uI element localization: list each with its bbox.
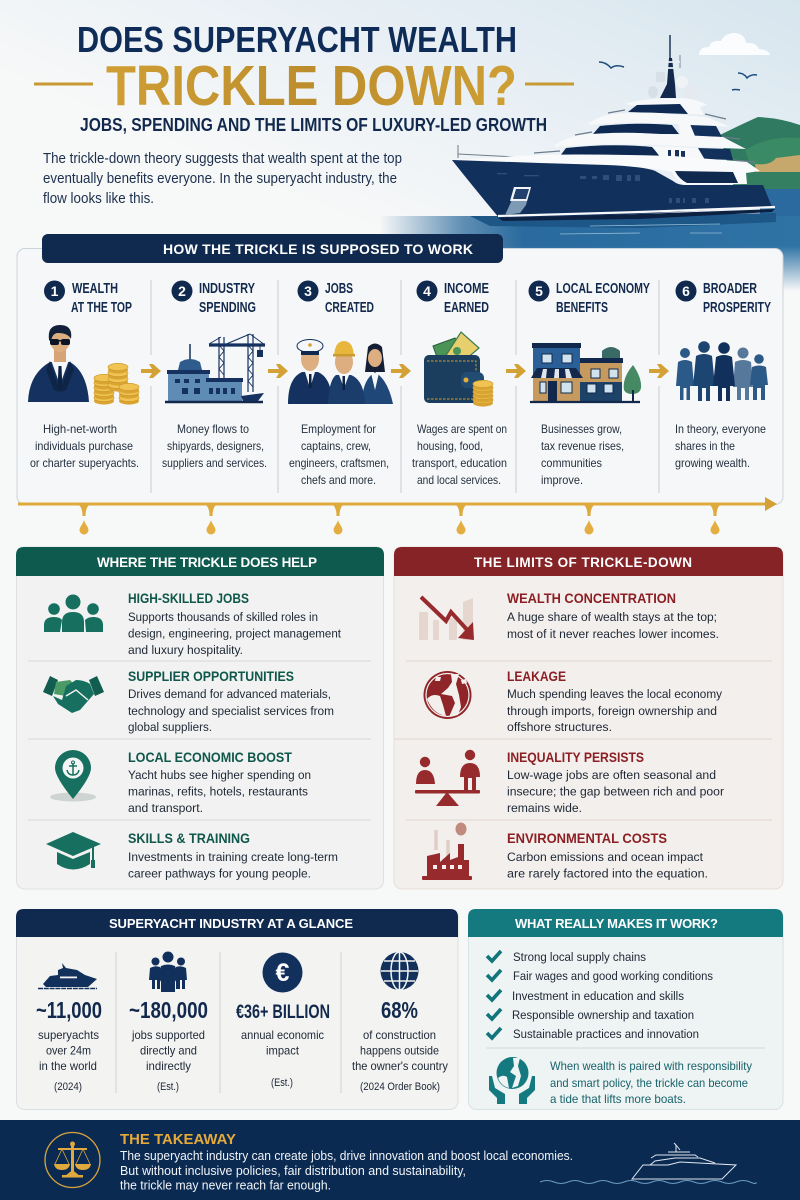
item: skills and training: career pathways for young people.: [128, 866, 311, 880]
step 1: AT THE TOP: [71, 300, 132, 316]
item: supplier opportunities: SUPPLIER OPPORTUNITIES: [128, 668, 294, 684]
checklist: Fair wages and good working conditions: [513, 969, 713, 983]
item: skills and training: Investments in training create long-term: [128, 850, 338, 864]
item: inequality persists: remains wide.: [507, 801, 582, 815]
deck 2: [555, 133, 746, 149]
sea: [380, 189, 800, 290]
panel: the takeaway: [0, 1120, 800, 1200]
hero illustration: superyacht at sea: [0, 33, 800, 291]
arrow: [506, 364, 526, 378]
step 1: High-net-worth: [43, 422, 117, 436]
item: local economic boost: and transport.: [128, 801, 203, 815]
checklist: Sustainable practices and innovation: [513, 1027, 699, 1041]
item: supplier opportunities: Drives demand for advanced materials,: [128, 687, 331, 701]
callout: a tide that lifts more boats.: [550, 1092, 686, 1106]
step 4: transport, education: [412, 456, 507, 470]
heading bar: [16, 547, 384, 576]
item: inequality persists: Low-wage jobs are often seasonal and: [507, 768, 716, 782]
hull: [452, 160, 772, 219]
item: wealth concentration: WEALTH CONCENTRATION: [507, 590, 676, 606]
step 1: individuals purchase: [35, 439, 133, 453]
step 3: chefs and more.: [301, 473, 376, 487]
stat: economic impact: impact: [266, 1044, 300, 1058]
step 6: 6: [682, 283, 690, 299]
background sky: [0, 0, 800, 290]
checklist: Responsible ownership and taxation: [512, 1008, 694, 1022]
item: high-skilled jobs: and luxury hospitality.: [128, 643, 243, 657]
title: [34, 19, 574, 118]
item: high-skilled jobs: design, engineering, project management: [128, 626, 342, 640]
step 2: [162, 280, 267, 470]
step 1: [28, 280, 139, 470]
step 1: or charter superyachts.: [30, 456, 139, 470]
stat: economic impact: annual economic: [241, 1028, 324, 1042]
heading bar: THE LIMITS OF TRICKLE-DOWN: [474, 555, 692, 570]
step 4: and local services.: [417, 473, 501, 487]
step 3: Employment for: [301, 422, 376, 436]
item: skills and training: SKILLS & TRAINING: [128, 830, 250, 846]
step 2: suppliers and services.: [162, 456, 267, 470]
step 3: 3: [304, 283, 312, 299]
item: local economic boost: [50, 749, 311, 815]
step 6: BROADER: [703, 281, 757, 297]
item: supplier opportunities: [43, 668, 334, 734]
item: leakage: LEAKAGE: [507, 668, 566, 684]
step 6: growing wealth.: [675, 456, 750, 470]
sky-to-page fade: [0, 246, 800, 291]
step 5: tax revenue rises,: [541, 439, 624, 453]
step 3: [288, 280, 393, 487]
stat: jobs: indirectly: [146, 1059, 191, 1073]
step 3: engineers, craftsmen,: [289, 456, 389, 470]
icon: handshake: [43, 676, 104, 713]
intro text: [43, 151, 402, 207]
checklist: Investment in education and skills: [512, 989, 684, 1003]
step 5: LOCAL ECONOMY: [556, 281, 650, 297]
stat: construction abroad: happens outside: [360, 1044, 439, 1058]
stat: construction abroad: (2024 Order Book): [360, 1081, 440, 1093]
icon: euro: €: [276, 959, 290, 987]
item: local economic boost: Yacht hubs see higher spending on: [128, 768, 311, 782]
step 3: JOBS: [325, 281, 353, 297]
step 2: Money flows to: [177, 422, 249, 436]
step 5: communities: [541, 456, 602, 470]
step 2: 2: [178, 283, 186, 299]
island: [720, 117, 800, 192]
step 5: BENEFITS: [556, 300, 608, 316]
item: high-skilled jobs: Supports thousands of skilled roles in: [128, 610, 318, 624]
step 3: CREATED: [325, 300, 374, 316]
step 1: WEALTH: [72, 281, 118, 297]
item: leakage: offshore structures.: [507, 720, 612, 734]
heading bar: WHAT REALLY MAKES IT WORK?: [515, 916, 718, 931]
step 2: SPENDING: [199, 300, 256, 316]
checklist: Strong local supply chains: [513, 950, 646, 964]
icon: wealthy man with coins: [28, 325, 139, 405]
step 6: shares in the: [675, 439, 735, 453]
takeaway text: [120, 1149, 573, 1192]
callout: and smart policy, the trickle can become: [550, 1076, 748, 1090]
arrow: [391, 364, 411, 378]
stat: economic impact: (Est.): [271, 1077, 293, 1089]
step 2: INDUSTRY: [199, 281, 255, 297]
panel: what really makes it work: [468, 909, 783, 1110]
icon: globe: [380, 952, 418, 990]
item: inequality persists: [415, 749, 724, 815]
panel: superyacht industry at a glance: [16, 909, 458, 1110]
icon: hands holding globe: [489, 1057, 535, 1104]
step 4: Wages are spent on: [417, 422, 507, 436]
stat: superyachts: in the world: [39, 1059, 97, 1073]
item: skills and training: [46, 830, 338, 880]
stat: economic impact: €36+ BILLION: [236, 1002, 330, 1023]
item: wealth concentration: [419, 590, 719, 641]
icon: shipyard and cranes: [165, 334, 265, 402]
step 4: 4: [423, 283, 431, 299]
stat: superyachts: over 24m: [46, 1044, 91, 1058]
step 4: EARNED: [444, 300, 489, 316]
step 1: 1: [51, 283, 59, 299]
stat: superyachts: superyachts: [38, 1028, 99, 1042]
step 5: [528, 280, 650, 487]
step 6: PROSPERITY: [703, 300, 771, 316]
takeaway text: the trickle may never reach far enough.: [120, 1178, 331, 1192]
heading bar: WHERE THE TRICKLE DOES HELP: [97, 555, 317, 570]
icon: group of people: [676, 341, 768, 401]
stat: jobs: [129, 952, 208, 1093]
yacht: [452, 35, 775, 221]
icon: anchor pin: [50, 750, 96, 802]
step 6: In theory, everyone: [675, 422, 766, 436]
icon: globe: [424, 671, 472, 719]
item: supplier opportunities: global suppliers.: [128, 720, 212, 734]
stat: construction abroad: 68%: [381, 997, 418, 1023]
arrow: [268, 364, 288, 378]
item: high-skilled jobs: HIGH-SKILLED JOBS: [128, 590, 249, 606]
step 6: [675, 280, 771, 470]
takeaway heading: THE TAKEAWAY: [120, 1131, 236, 1148]
item: inequality persists: insecure; the gap between rich and poor: [507, 784, 724, 798]
item: environmental costs: are rarely factored into the equation.: [507, 866, 708, 880]
item: local economic boost: LOCAL ECONOMIC BOOST: [128, 749, 292, 765]
stat: construction abroad: of construction: [363, 1028, 436, 1042]
heading bar: SUPERYACHT INDUSTRY AT A GLANCE: [109, 916, 353, 931]
icon: graduation cap: [46, 832, 101, 870]
panel: how the trickle is supposed to work: [17, 234, 783, 534]
stat: superyachts: (2024): [54, 1081, 82, 1093]
stat: jobs: ~180,000: [129, 997, 208, 1023]
step 5: 5: [535, 283, 543, 299]
icon: people: [44, 594, 103, 632]
item: inequality persists: INEQUALITY PERSISTS: [507, 749, 644, 765]
icon: local shops: [530, 343, 641, 402]
item: wealth concentration: most of it never reaches lower incomes.: [507, 627, 719, 641]
stat: construction abroad: the owner's country: [352, 1059, 448, 1073]
icon: birds: [599, 62, 757, 90]
heading bar: [42, 234, 503, 263]
arrow: [649, 364, 669, 378]
icon: factory with smoke: [422, 822, 472, 880]
step 4: housing, food,: [417, 439, 483, 453]
deck 3: [589, 113, 730, 127]
item: high-skilled jobs: [44, 590, 342, 657]
item: environmental costs: ENVIRONMENTAL COSTS: [507, 830, 667, 846]
stat: jobs: jobs supported: [131, 1028, 205, 1042]
step 5: improve.: [541, 473, 583, 487]
stat: superyachts: ~11,000: [36, 997, 102, 1023]
subtitle: JOBS, SPENDING AND THE LIMITS OF LUXURY-LED GROWTH: [80, 115, 547, 135]
step 3: captains, crew,: [301, 439, 371, 453]
intro text: flow looks like this.: [43, 191, 154, 207]
arrow: gold timeline with drips: [18, 497, 777, 534]
item: environmental costs: [422, 822, 708, 880]
item: leakage: Much spending leaves the local economy: [507, 687, 723, 701]
stat: superyachts: [36, 963, 102, 1093]
icon: crew team: [288, 340, 393, 404]
panel: where the trickle does help: [16, 547, 384, 889]
stat: economic impact: [236, 952, 330, 1089]
item: local economic boost: marinas, refits, hotels, restaurants: [128, 784, 308, 798]
heading bar: [394, 547, 783, 576]
heading bar: [468, 909, 783, 937]
icon: unbalanced seesaw: [415, 750, 480, 806]
step 4: [412, 280, 507, 487]
callout: [550, 1059, 752, 1106]
main deck: [458, 145, 515, 158]
title: TRICKLE DOWN?: [106, 54, 517, 118]
icon: yacht outline: [540, 1143, 756, 1184]
item: environmental costs: Carbon emissions and ocean impact: [507, 850, 704, 864]
icon: cloud: [699, 33, 770, 55]
step 2: shipyards, designers,: [167, 439, 264, 453]
stat: jobs: (Est.): [157, 1081, 179, 1093]
item: supplier opportunities: technology and specialist services from: [128, 704, 334, 718]
item: wealth concentration: A huge share of wealth stays at the top;: [507, 610, 717, 624]
icon: falling chart: [419, 597, 474, 640]
takeaway text: The superyacht industry can create jobs, drive innovation and boost local economies.: [120, 1149, 573, 1163]
heading bar: HOW THE TRICKLE IS SUPPOSED TO WORK: [163, 241, 473, 257]
step 4: INCOME: [444, 281, 489, 297]
intro text: eventually benefits everyone. In the superyacht industry, the: [43, 171, 397, 187]
icon: people: [149, 952, 187, 992]
heading bar: [16, 909, 458, 937]
icon: yacht: [38, 963, 97, 988]
intro text: The trickle-down theory suggests that wealth spent at the top: [43, 151, 402, 167]
takeaway text: But without inclusive policies, fair distribution and sustainability,: [120, 1164, 466, 1178]
item: leakage: through imports, foreign ownership and: [507, 704, 717, 718]
title: DOES SUPERYACHT WEALTH: [77, 19, 517, 60]
step 5: Businesses grow,: [541, 422, 622, 436]
stat: jobs: directly and: [140, 1044, 197, 1058]
checklist: [487, 950, 713, 1041]
item: leakage: [424, 668, 723, 734]
stat: construction abroad: [352, 952, 448, 1093]
icon: scales of justice: [45, 1132, 100, 1188]
deck 4: [625, 98, 707, 115]
panel: the limits of trickle-down: [394, 547, 783, 889]
callout: When wealth is paired with responsibility: [550, 1059, 752, 1073]
icon: wallet with cash and coins: [424, 332, 493, 407]
arrow: [141, 364, 161, 378]
